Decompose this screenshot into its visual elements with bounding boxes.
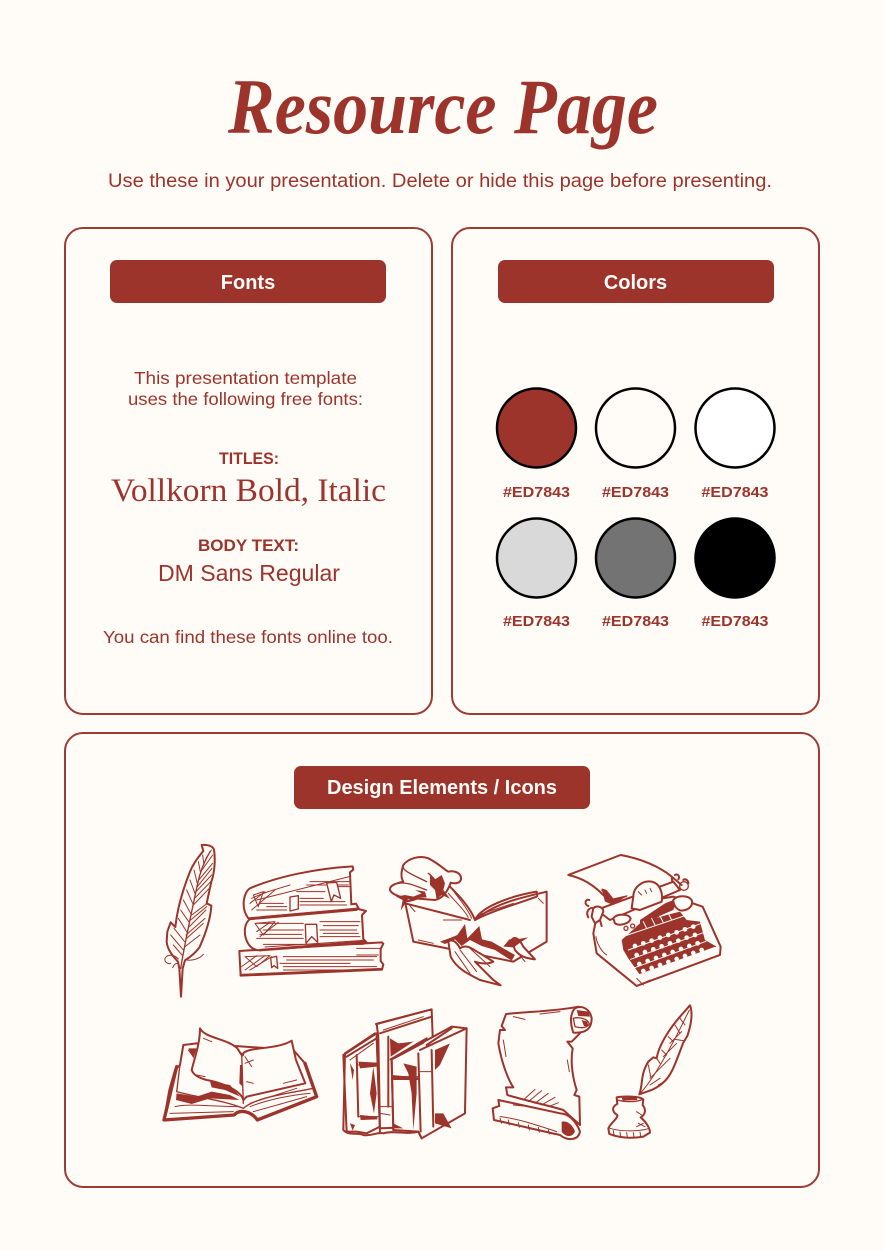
body font name: DM Sans Regular: [158, 560, 340, 586]
swatch 4: #ED7843: [503, 614, 570, 630]
titles font name: Vollkorn Bold, Italic: [111, 473, 386, 509]
icon: hands holding open book: [390, 857, 547, 985]
icon: stacked books: [239, 866, 383, 976]
swatch 5: #ED7843: [602, 614, 669, 630]
swatch 2: #ED7843: [602, 485, 669, 501]
swatch 3: #ED7843: [702, 485, 768, 501]
fonts intro text: [128, 368, 363, 409]
icon: scroll: [493, 1007, 592, 1139]
fonts heading: [110, 260, 386, 303]
panel: colors: [452, 228, 819, 714]
swatch 4: [497, 518, 576, 630]
design elements heading: Design Elements / Icons: [327, 777, 557, 799]
swatch 6: [696, 518, 774, 630]
panel: design elements: [65, 733, 819, 1187]
swatch 6: #ED7843: [702, 614, 768, 630]
subtitle: Use these in your presentation. Delete or hide this page before presenting.: [108, 171, 772, 192]
colors heading: [498, 260, 774, 303]
swatch 5: [596, 518, 675, 630]
swatch 2: [596, 388, 675, 501]
fonts intro text: This presentation template: [134, 368, 357, 388]
fonts heading: Fonts: [221, 272, 275, 294]
titles font label: TITLES:: [219, 450, 279, 468]
fonts note: You can find these fonts online too.: [103, 627, 393, 647]
icon: upright books: [343, 1009, 467, 1138]
title: Resource Page: [227, 63, 658, 150]
fonts intro text: uses the following free fonts:: [128, 389, 363, 409]
swatch 1: #ED7843: [503, 485, 570, 501]
swatch 1: [497, 388, 576, 501]
colors heading: Colors: [604, 272, 667, 294]
icon: typewriter: [568, 855, 721, 986]
swatch 3: [696, 388, 774, 501]
icon: feather: [165, 845, 215, 997]
design elements heading: [294, 766, 590, 809]
icon: open book: [164, 1028, 317, 1120]
panel: fonts: [65, 228, 432, 714]
icon: inkwell and quill: [608, 1005, 692, 1138]
body font label: BODY TEXT:: [198, 537, 299, 555]
